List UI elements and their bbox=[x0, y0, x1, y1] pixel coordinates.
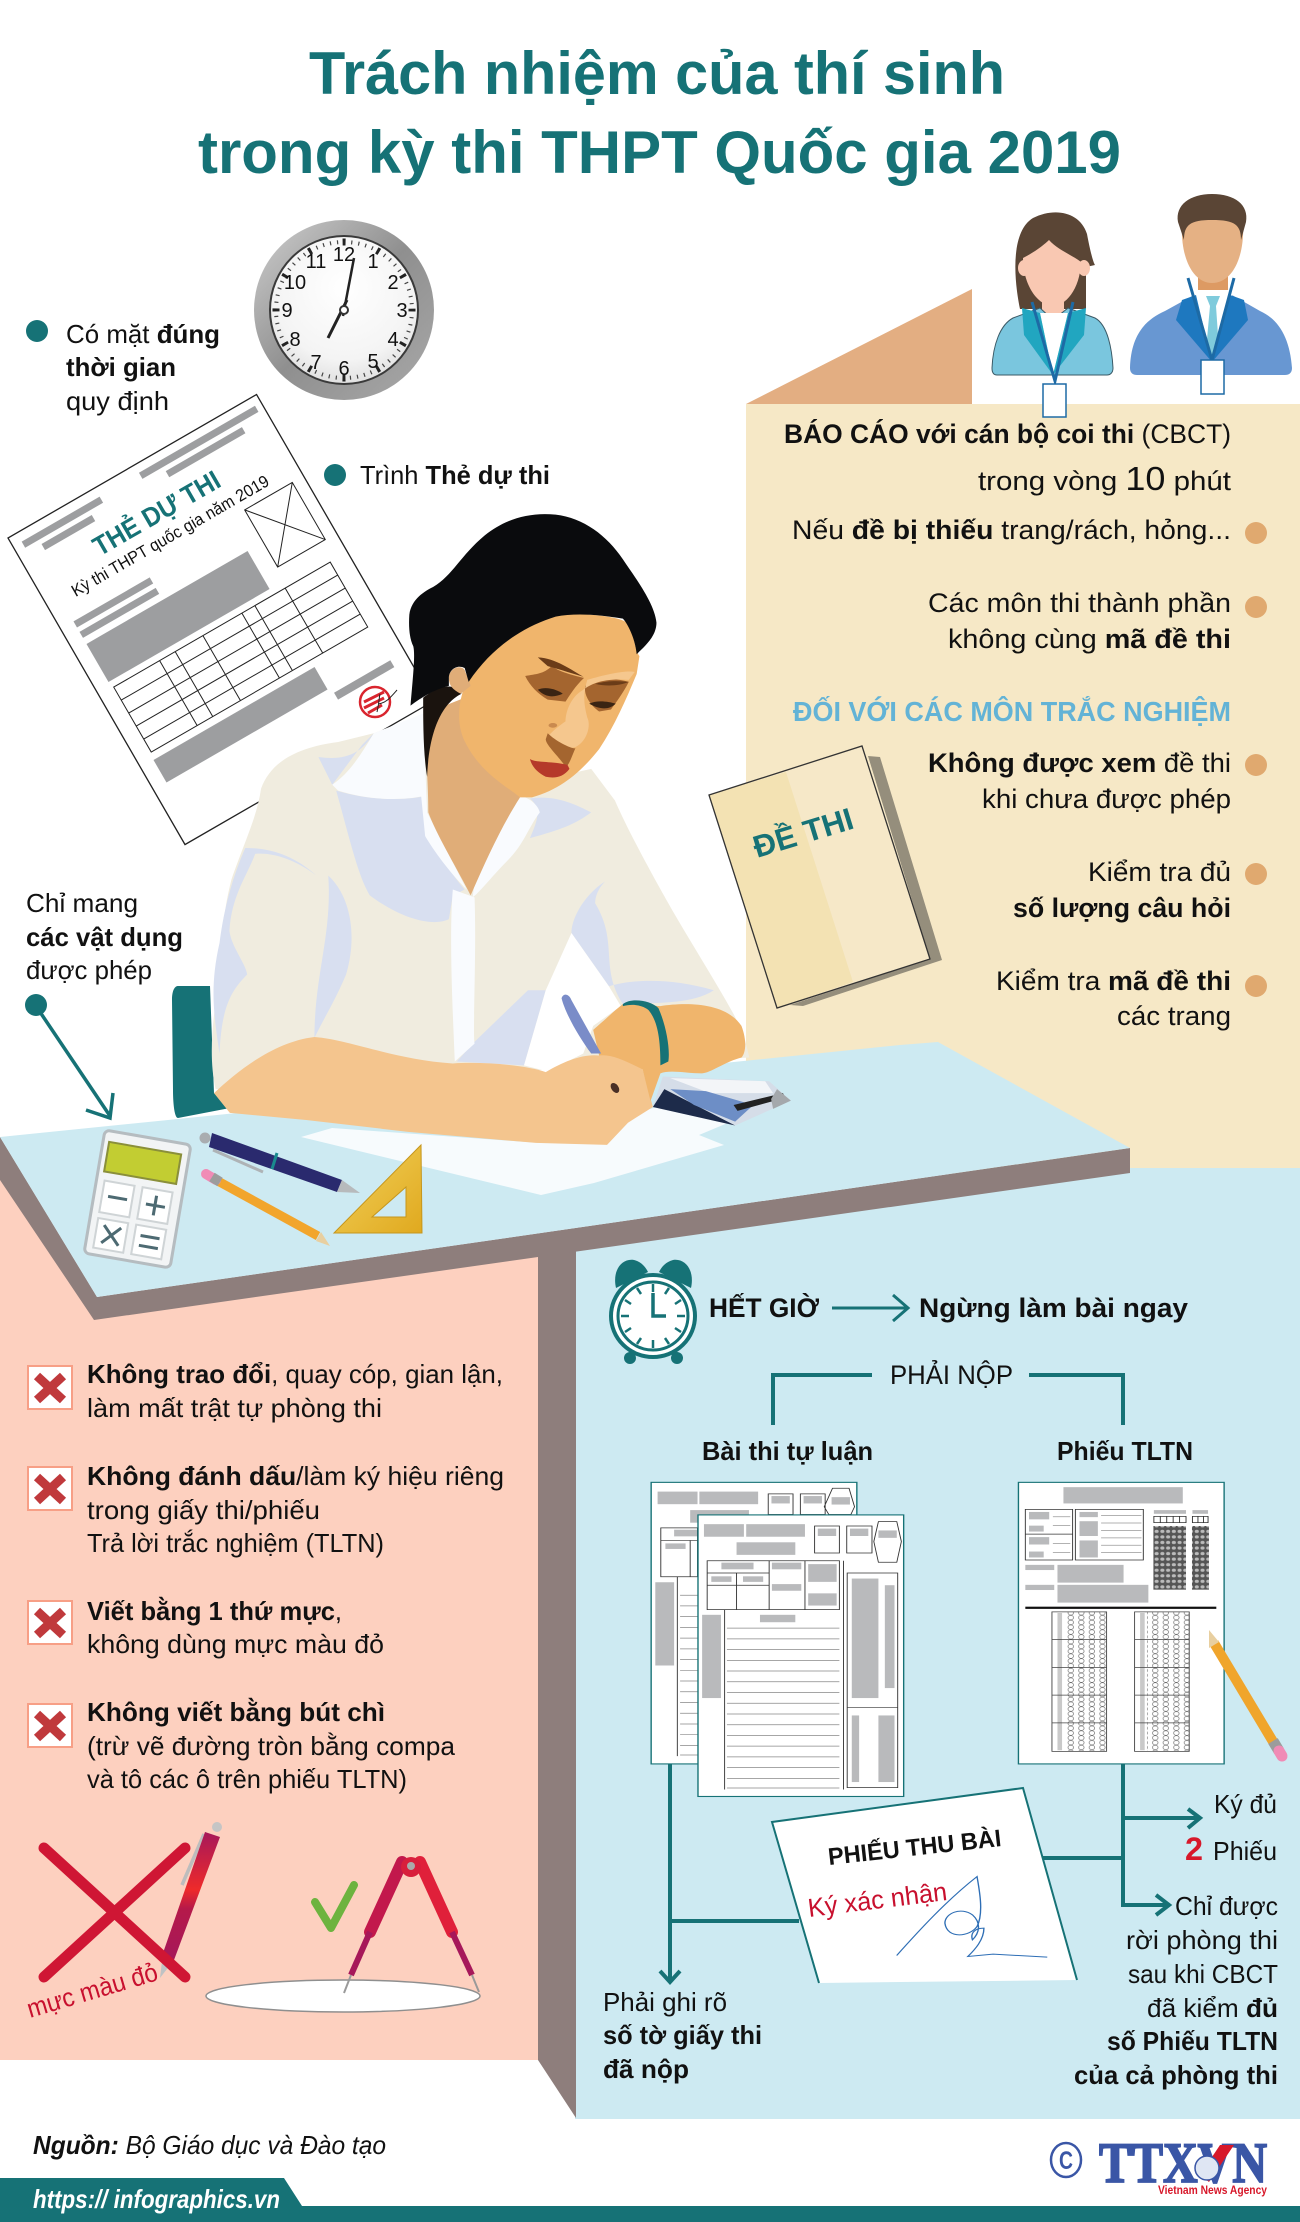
admission card: THẺ DỰ THI bbox=[87, 463, 226, 562]
text: note sheet count: Phải ghi rõ bbox=[603, 1987, 727, 2017]
exam folder bbox=[709, 746, 942, 1008]
source: Nguồn: Bộ Giáo dục và Đào tạo bbox=[33, 2130, 386, 2160]
ear bbox=[449, 667, 471, 694]
text: sign both sheets: Phiếu bbox=[1213, 1836, 1277, 1866]
rule 4: và tô các ô trên phiếu TLTN) bbox=[87, 1764, 407, 1794]
white gap bbox=[524, 933, 621, 1071]
icon: wall clock: 9 bbox=[281, 300, 293, 322]
rule 3: Viết bằng 1 thứ mực, bbox=[87, 1596, 342, 1626]
text: present admission card: Trình Thẻ dự thi bbox=[360, 460, 550, 490]
pen grip mark bbox=[609, 1081, 621, 1095]
icon: wall clock: 11 bbox=[306, 251, 326, 273]
text: leaving the room: sau khi CBCT bbox=[1128, 1959, 1278, 1989]
footer bar bbox=[0, 2178, 1300, 2222]
answer sheet bbox=[1018, 1482, 1224, 1764]
panel text: report to invigilator: không cùng mã đề thi bbox=[948, 624, 1231, 654]
card stamp bbox=[360, 687, 397, 717]
admission card: Kỳ thi THPT quốc gia năm 2019 bbox=[68, 472, 272, 601]
rule 2 bbox=[28, 1461, 504, 1558]
text: time up: HẾT GIỜ bbox=[709, 1292, 819, 1323]
panel text: multiple choice checks: các trang bbox=[1117, 1001, 1231, 1031]
icon: wall clock: 12 bbox=[333, 244, 355, 266]
icon: green check bbox=[315, 1885, 354, 1928]
rule 3: không dùng mực màu đỏ bbox=[87, 1629, 384, 1659]
text: be on time bbox=[26, 319, 220, 416]
shirt bbox=[212, 714, 749, 1089]
icon: navy pen bbox=[200, 1132, 360, 1193]
shirt shading bbox=[214, 733, 714, 1065]
text: allowed items: Chỉ mang bbox=[26, 888, 138, 918]
footer bar: https:// infographics.vn bbox=[33, 2184, 280, 2214]
rule 2: Không đánh dấu/làm ký hiệu riêng bbox=[87, 1461, 504, 1491]
panel text: multiple choice checks: Kiểm tra đủ bbox=[1088, 857, 1231, 887]
back sheet bbox=[651, 1482, 857, 1764]
logo: TTXVN: TTXVN bbox=[1099, 2132, 1267, 2195]
chair bbox=[172, 986, 230, 1118]
text: be on time: Có mặt đúng bbox=[66, 319, 220, 349]
icon: compass and circle bbox=[206, 1857, 480, 2012]
text: be on time: quy định bbox=[66, 386, 169, 416]
heading: multiple choice subjects: ĐỐI VỚI CÁC MÔN TRẮC NGHIỆM bbox=[793, 695, 1231, 727]
panel text: report to invigilator: Nếu đề bị thiếu trang/rách, hỏng... bbox=[792, 515, 1231, 545]
text: note sheet count: số tờ giấy thi bbox=[603, 2020, 762, 2050]
icon: set square bbox=[334, 1145, 422, 1233]
student figure bbox=[212, 514, 791, 1145]
rule 4: Không viết bằng bút chì bbox=[87, 1697, 385, 1727]
prohibitions list bbox=[28, 1359, 504, 1794]
icon: wall clock bbox=[254, 220, 434, 400]
rule 1 bbox=[28, 1359, 503, 1423]
text: stop working immediately: Ngừng làm bài ngay bbox=[919, 1293, 1188, 1323]
eyes and nose bbox=[525, 657, 635, 767]
front sheet bbox=[698, 1515, 904, 1796]
icon: female invigilator bbox=[992, 212, 1113, 417]
icon: wall clock: 1 bbox=[367, 251, 379, 273]
text: note sheet count: đã nộp bbox=[603, 2054, 689, 2084]
rule 2: Trả lời trắc nghiệm (TLTN) bbox=[87, 1528, 384, 1558]
neck bbox=[425, 698, 520, 895]
text: leaving the room: của cả phòng thi bbox=[1074, 2060, 1278, 2090]
hair shadow bbox=[423, 687, 462, 777]
icon: wall clock: 7 bbox=[310, 352, 322, 374]
icon: wall clock: 3 bbox=[396, 300, 408, 322]
rule 1: làm mất trật tự phòng thi bbox=[87, 1393, 382, 1423]
panel text: multiple choice checks: khi chưa được phép bbox=[982, 784, 1231, 814]
bracelet bbox=[623, 1000, 669, 1065]
text: sign both sheets: Ký đủ bbox=[1214, 1789, 1277, 1819]
admission card bbox=[8, 394, 434, 845]
arrow: stop working bbox=[832, 1295, 908, 1321]
other hand bbox=[593, 1004, 745, 1101]
panel text: report to invigilator: BÁO CÁO với cán bộ coi thi (CBCT) bbox=[784, 418, 1231, 449]
connector lines bbox=[660, 1764, 1200, 1982]
text: leaving the room: Chỉ được bbox=[1175, 1891, 1278, 1921]
text: leaving the room: rời phòng thi bbox=[1126, 1925, 1278, 1955]
icon: male invigilator bbox=[1130, 194, 1292, 394]
panel text: multiple choice checks: Không được xem đề thi bbox=[928, 748, 1231, 778]
paper bundle bbox=[653, 1076, 791, 1126]
desk top bbox=[0, 1042, 1130, 1297]
text: allowed items: được phép bbox=[26, 955, 152, 985]
text: allowed items bbox=[26, 888, 183, 985]
panel text: multiple choice checks: số lượng câu hỏi bbox=[1013, 893, 1231, 923]
arrow: allowed items bbox=[25, 994, 113, 1118]
icon: alarm clock bbox=[611, 1260, 695, 1364]
panel text: report to invigilator: Các môn thi thành phần bbox=[928, 588, 1231, 618]
icon: wall clock: 4 bbox=[387, 329, 399, 351]
panel text: report to invigilator bbox=[784, 418, 1232, 654]
text: sign both sheets bbox=[1185, 1789, 1277, 1867]
collection slip bbox=[772, 1788, 1077, 1983]
logo: TTXVN bbox=[1051, 2132, 1267, 2197]
rule 1: Không trao đổi, quay cóp, gian lận, bbox=[87, 1359, 503, 1389]
collection slip: PHIẾU THU BÀI bbox=[827, 1824, 1003, 1871]
panel: time up background bbox=[575, 1168, 1300, 2119]
text: allowed items: các vật dụng bbox=[26, 922, 183, 952]
rule 4: (trừ vẽ đường tròn bằng compa bbox=[87, 1731, 456, 1761]
bracket: must submit bbox=[773, 1358, 1123, 1425]
desk leg bbox=[538, 1245, 576, 2118]
label: essay paper: Bài thi tự luận bbox=[702, 1436, 873, 1466]
icon: wall clock: 6 bbox=[338, 358, 350, 380]
icon: wall clock: 5 bbox=[367, 351, 379, 373]
title: trong kỳ thi THPT Quốc gia 2019 bbox=[198, 119, 1121, 186]
label: red ink: mực màu đỏ bbox=[23, 1957, 161, 2024]
icon: pencil on answer sheet bbox=[1209, 1630, 1282, 1756]
collection slip: Ký xác nhận bbox=[806, 1876, 949, 1923]
rule 2: trong giấy thi/phiếu bbox=[87, 1495, 320, 1525]
rule 4 bbox=[28, 1697, 456, 1794]
panel: prohibitions background bbox=[0, 1170, 538, 2060]
icon: wall clock: 2 bbox=[387, 272, 399, 294]
icon: yellow pencil bbox=[206, 1174, 330, 1246]
label: answer sheet: Phiếu TLTN bbox=[1057, 1436, 1193, 1466]
exam folder: ĐỀ THI bbox=[749, 801, 858, 865]
panel: report to invigilator background bbox=[746, 289, 1300, 1174]
writing arm bbox=[214, 1037, 653, 1145]
bracket: must submit: PHẢI NỘP bbox=[890, 1358, 1013, 1390]
bullets: report list bbox=[1245, 522, 1267, 997]
text: be on time: thời gian bbox=[66, 352, 176, 382]
lips bbox=[530, 759, 569, 777]
essay sheets bbox=[651, 1482, 904, 1796]
text: leaving the room: số Phiếu TLTN bbox=[1107, 2026, 1278, 2056]
text: leaving the room: đã kiểm đủ bbox=[1147, 1993, 1278, 2023]
rule 3 bbox=[28, 1596, 384, 1659]
collar bbox=[332, 714, 540, 1061]
panel text: multiple choice checks: Kiểm tra mã đề thi bbox=[996, 966, 1231, 996]
logo: TTXVN: C bbox=[1059, 2147, 1073, 2175]
title: Trách nhiệm của thí sinh bbox=[309, 40, 1005, 107]
icon: wall clock: 8 bbox=[289, 329, 301, 351]
text: sign both sheets: 2 bbox=[1185, 1831, 1203, 1867]
pen in hand bbox=[562, 995, 601, 1054]
panel text: report to invigilator: trong vòng 10 phút bbox=[978, 460, 1232, 497]
logo: TTXVN: Vietnam News Agency bbox=[1158, 2183, 1267, 2197]
desk edge bbox=[0, 1137, 1130, 1320]
text: leaving the room bbox=[1074, 1891, 1278, 2090]
text: note sheet count bbox=[603, 1987, 762, 2084]
panel text: multiple choice checks bbox=[928, 748, 1231, 1031]
hair bbox=[409, 514, 656, 706]
icon: calculator bbox=[84, 1130, 191, 1268]
icon: wall clock: 10 bbox=[284, 272, 306, 294]
face bbox=[459, 614, 639, 797]
scratch paper bbox=[301, 1107, 730, 1195]
title bbox=[198, 40, 1121, 186]
icon: red pen crossed out bbox=[44, 1822, 222, 1978]
